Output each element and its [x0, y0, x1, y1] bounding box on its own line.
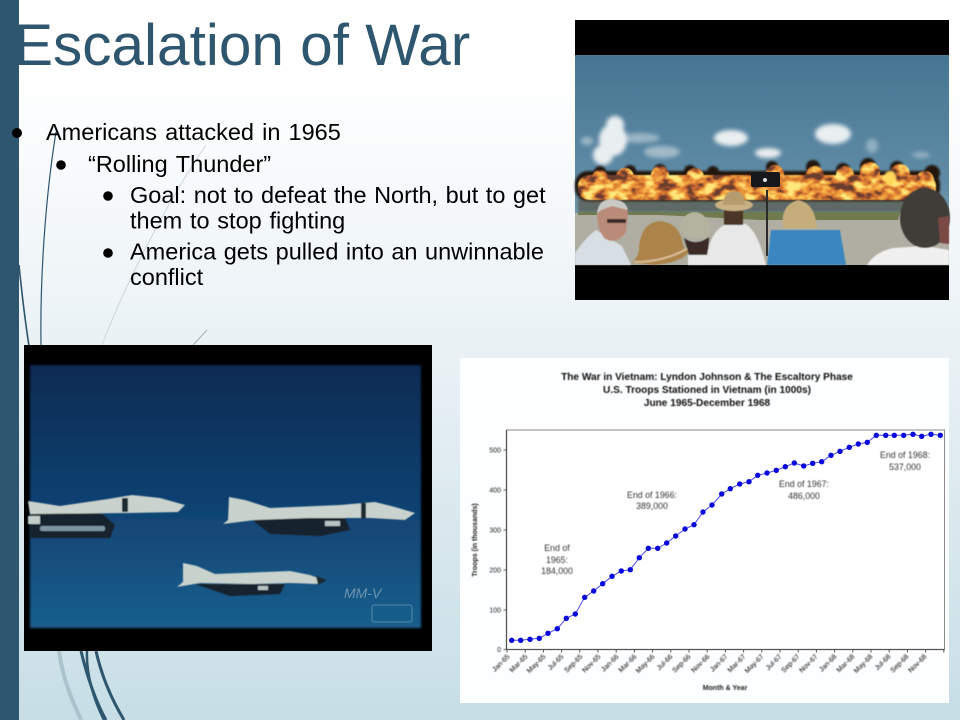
spectators: [575, 188, 950, 265]
bullet 1.1.1: [103, 182, 546, 234]
bullet 1.1.1: them to stop fighting: [130, 208, 345, 234]
grey cap: [680, 212, 712, 265]
x axis labels: Nov-68: [907, 653, 928, 674]
annotation: end of 1967: 486,000: [788, 491, 820, 501]
photo: napalm explosion at air show: [575, 20, 950, 300]
x axis labels: May-67: [744, 653, 765, 675]
runway: [575, 213, 949, 265]
man with dark hair: [867, 188, 950, 265]
annotation: end of 1966: [627, 490, 677, 511]
x axis labels: Nov-67: [798, 653, 819, 674]
annotation: end of 1967: [779, 479, 829, 501]
annotation: end of 1965: 184,000: [541, 566, 573, 576]
annotation: end of 1966: 389,000: [636, 501, 668, 511]
x axis labels: Mar-66: [618, 653, 638, 674]
x axis labels: Sep-68: [889, 653, 910, 674]
x axis labels: Jul-65: [547, 653, 565, 672]
x axis labels: Mar-65: [509, 653, 529, 674]
photo: F-4 jets in formation: [24, 345, 432, 651]
annotation: end of 1966: End of 1966:: [627, 490, 677, 500]
grass strip: [578, 212, 900, 220]
x axis ticks: [507, 650, 944, 652]
annotation: end of 1965: [541, 543, 573, 576]
y axis: 300: [489, 528, 501, 534]
x axis labels: Nov-65: [581, 653, 602, 674]
tree line: [578, 198, 943, 212]
chart title: U.S. Troops Stationed in Vietnam (in 1000s): [603, 385, 811, 396]
plot frame: [506, 430, 944, 650]
x axis labels: Jan-67: [709, 653, 729, 674]
clouds: [581, 116, 930, 165]
watermark: MM-V: [344, 585, 383, 601]
watermark: [344, 585, 412, 622]
x axis labels: Jul-67: [765, 653, 783, 672]
chart title: June 1965-December 1968: [644, 398, 771, 409]
title: Escalation of War: [14, 13, 470, 78]
bullet list: [12, 119, 546, 290]
y axis: [472, 448, 506, 654]
y axis: 100: [489, 608, 501, 614]
y axis: 0: [497, 647, 501, 654]
x axis labels: Sep-67: [780, 653, 801, 674]
x axis labels: Mar-68: [836, 653, 856, 674]
x axis labels: [491, 653, 928, 675]
decorative grass strokes: [19, 132, 207, 720]
bullet 1.1.2: [103, 238, 544, 290]
bullet 1.1.2: conflict: [130, 264, 204, 290]
left sidebar: [0, 0, 19, 720]
x axis labels: May-65: [526, 653, 547, 675]
y axis: 500: [489, 448, 501, 454]
y axis: 400: [489, 488, 501, 494]
annotation: end of 1965: End of: [544, 543, 570, 553]
x axis labels: Nov-66: [690, 653, 711, 674]
straw sun hat: [632, 221, 689, 265]
annotation: end of 1965: 1965:: [546, 555, 568, 565]
x axis title: Month & Year: [703, 685, 748, 692]
bullet 1.1.1: Goal: not to defeat the North, but to get: [130, 182, 546, 208]
annotation: end of 1968: End of 1968:: [880, 450, 930, 460]
jet left: [28, 495, 185, 538]
x axis labels: Mar-67: [727, 653, 747, 674]
speaker on pole: [751, 172, 780, 256]
man in white shirt and hat: [706, 191, 766, 265]
blue chair: [767, 230, 846, 265]
troop line series: [509, 432, 943, 643]
x axis labels: Sep-66: [671, 653, 692, 674]
man in white jacket: [575, 199, 631, 265]
x axis labels: Jan-68: [818, 653, 838, 674]
annotation: end of 1968: [880, 450, 930, 472]
bullet 1.1: “Rolling Thunder”: [88, 151, 271, 177]
chart title: The War in Vietnam: Lyndon Johnson & The Escaltory Phase: [561, 372, 853, 383]
jet right: [223, 497, 415, 536]
x axis labels: Jan-65: [491, 653, 511, 674]
annotation: end of 1967: End of 1967:: [779, 479, 829, 489]
chart title: [561, 372, 853, 409]
y axis: Troops (in thousands): [472, 503, 479, 577]
x axis labels: Sep-65: [563, 653, 584, 674]
x axis labels: Jul-68: [874, 653, 892, 672]
x axis labels: Jul-66: [656, 653, 674, 672]
bullet 1: Americans attacked in 1965: [46, 119, 341, 145]
x axis labels: Jan-66: [600, 653, 620, 674]
jet bottom: [177, 563, 327, 596]
chart image: US troops in Vietnam: [460, 358, 949, 703]
bullet 1.1.2: America gets pulled into an unwinnable: [130, 238, 544, 264]
x axis labels: May-66: [635, 653, 656, 675]
fireball: [575, 158, 940, 201]
y axis: 200: [489, 568, 501, 574]
x axis labels: May-68: [853, 653, 874, 675]
annotation: end of 1968: 537,000: [889, 462, 921, 472]
blonde spectator: [783, 200, 817, 228]
